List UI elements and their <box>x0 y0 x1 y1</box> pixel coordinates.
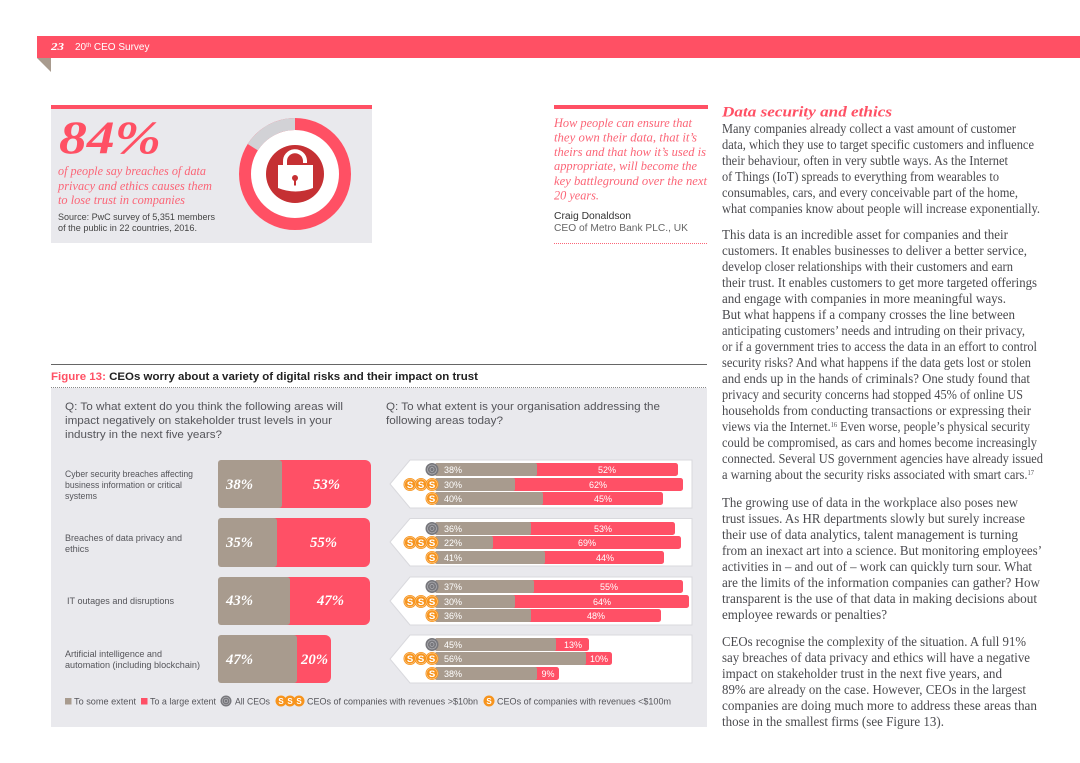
legend: S <box>287 697 293 706</box>
bar group: IT outages: 36% <box>444 611 462 621</box>
bar group: cyber security: 38% <box>444 465 462 475</box>
bar group: artificial intelligence: 38% <box>444 669 462 679</box>
stacked bar chart: stakeholder trust impact: 47% <box>316 593 344 609</box>
body paragraph 3: trust issues. As HR departments slowly but surely increase <box>722 511 1025 526</box>
body paragraph 2: Even worse, people’s physical security <box>837 419 1030 434</box>
question right: following areas today? <box>386 415 503 427</box>
row labels <box>65 469 200 670</box>
body paragraph 3: employee rewards or penalties? <box>722 607 887 622</box>
pull quote: appropriate, will become the <box>554 158 697 173</box>
statistic description: of people say breaches of data <box>58 163 206 178</box>
body paragraph 4: say breaches of data privacy and ethics will have a negative <box>722 650 1030 665</box>
bar group: IT outages: 55% <box>600 582 618 592</box>
donut chart with lock icon <box>239 118 351 230</box>
body paragraph 2: a warning about the security risks associated with smart cars. <box>722 467 1052 482</box>
header band: 20 <box>75 42 86 53</box>
bar group: cyber security: 62% <box>589 480 607 490</box>
body paragraph 3 <box>722 495 1042 622</box>
body paragraph 2: 17 <box>1028 469 1034 477</box>
bar group: artificial intelligence: 10% <box>590 654 608 664</box>
body paragraph 2: views via the Internet. <box>722 419 842 434</box>
row labels: Breaches of data privacy and <box>65 533 182 543</box>
bar group: data privacy: 36% <box>444 524 462 534</box>
legend <box>65 696 671 706</box>
legend: To a large extent <box>150 696 216 706</box>
bar group: cyber security: 30% <box>444 480 462 490</box>
source note: of the public in 22 countries, 2016. <box>58 223 197 233</box>
question left: impact negatively on stakeholder trust levels in your <box>65 415 332 427</box>
question left <box>65 401 343 441</box>
pull quote: theirs and that how it’s used is <box>554 144 706 159</box>
source note <box>58 212 215 233</box>
body paragraph 2: could be compromised, as cars and homes become increasingly <box>722 435 1037 450</box>
bar group: IT outages <box>390 577 692 625</box>
stacked bar chart: stakeholder trust impact: 20% <box>300 652 328 668</box>
bar group: IT outages: S <box>407 597 413 608</box>
row labels: IT outages and disruptions <box>67 596 174 606</box>
bar group: artificial intelligence: 9% <box>541 669 555 679</box>
question left: industry in the next five years? <box>65 429 222 441</box>
body paragraph 2: 16 <box>831 421 837 429</box>
source note: Source: PwC survey of 5,351 members <box>58 212 215 222</box>
pull quote: 20 years. <box>554 188 599 202</box>
body paragraph 2: anticipating customers’ needs and intruding on their privacy, <box>722 323 1025 338</box>
bar group: IT outages: 30% <box>444 597 462 607</box>
row labels: automation (including blockchain) <box>65 660 200 670</box>
bar group: artificial intelligence <box>390 635 692 683</box>
bar group: cyber security: 45% <box>594 494 612 504</box>
stacked bar chart: stakeholder trust impact: 53% <box>313 477 340 493</box>
bar group: data privacy: S <box>418 538 424 549</box>
pull quote: Craig Donaldson <box>554 211 631 222</box>
statistic description <box>57 163 212 207</box>
bar group: cyber security: 52% <box>598 465 616 475</box>
body paragraph 2: But what happens if a company crosses the line between <box>722 307 1015 322</box>
question right <box>386 401 660 427</box>
stacked bar chart: stakeholder trust impact: 55% <box>310 535 337 551</box>
bar group: data privacy: 44% <box>596 553 614 563</box>
row labels: Artificial intelligence and <box>65 649 162 659</box>
header band: 23 <box>50 41 65 53</box>
header band: CEO Survey <box>91 42 150 53</box>
bar group: data privacy: 69% <box>578 538 596 548</box>
body paragraph 2: and ends up in the hands of criminals? One study found that <box>722 371 1030 386</box>
figure title: Figure 13: CEOs worry about a variety of digital risks and their impact on trust <box>51 371 478 383</box>
statistic description: to lose trust in companies <box>58 192 185 207</box>
bar group: cyber security: S <box>429 480 435 491</box>
body paragraph 4: CEOs recognise the complexity of the situation. A full 91% <box>722 634 1026 649</box>
big number: 84% <box>59 112 161 164</box>
bar group: data privacy <box>390 518 692 566</box>
body paragraph 4: 89% are already on the case. However, CEOs in the largest <box>722 682 1026 697</box>
bar group: IT outages: 48% <box>587 611 605 621</box>
question left: Q: To what extent do you think the following areas will <box>65 401 343 413</box>
legend: CEOs of companies with revenues <$100m <box>497 696 671 706</box>
body paragraph 3: are the limits of the information companies can gather? How <box>722 575 1040 590</box>
bar group: data privacy: 22% <box>444 538 462 548</box>
bar group: data privacy: 53% <box>594 524 612 534</box>
bar group: artificial intelligence: S <box>407 654 413 665</box>
header band <box>37 36 1080 72</box>
bar group: artificial intelligence: S <box>429 669 435 680</box>
bar group: IT outages: 64% <box>593 597 611 607</box>
legend: All CEOs <box>235 696 270 706</box>
bar group: IT outages: 37% <box>444 582 462 592</box>
bar group: cyber security <box>390 460 692 508</box>
bar group: cyber security: S <box>418 480 424 491</box>
body paragraph 2: connected. Several US government agencies have already issued <box>722 451 1043 466</box>
bar group: artificial intelligence: 56% <box>444 654 462 664</box>
body paragraph 3: activities in – and out of – work can quickly turn sour. What <box>722 559 1032 574</box>
legend: S <box>486 697 492 706</box>
body paragraph 3: transparent is the use of that data in making decisions about <box>722 591 1037 606</box>
body paragraph 1 <box>722 121 1040 216</box>
stacked bar chart: stakeholder trust impact: 38% <box>225 477 253 493</box>
body paragraph 2: security risks? And what happens if the data gets lost or stolen <box>722 355 1031 370</box>
legend: S <box>296 697 302 706</box>
row labels: business information or critical <box>65 480 182 490</box>
pull quote: How people can ensure that <box>553 115 692 130</box>
bar group: IT outages: S <box>418 597 424 608</box>
bar group: artificial intelligence: S <box>429 654 435 665</box>
legend: CEOs of companies with revenues >$10bn <box>307 696 478 706</box>
header band: th <box>86 43 91 49</box>
bar group: data privacy: S <box>407 538 413 549</box>
body paragraph 1: their behaviour, often in very subtle ways. As the Internet <box>722 153 1008 168</box>
body paragraph 2: develop closer relationships with their customers and earn <box>722 259 1013 274</box>
pull quote <box>553 105 708 244</box>
body paragraph 1: of Things (IoT) spreads to everything from wearables to <box>722 169 999 184</box>
panel: 84% statistic <box>51 105 372 243</box>
stacked bar chart: stakeholder trust impact <box>218 460 371 683</box>
legend: To some extent <box>74 696 136 706</box>
body paragraph 1: data, which they use to target specific customers and influence <box>722 137 1034 152</box>
bar group: IT outages: S <box>429 611 435 622</box>
bar group: cyber security: 40% <box>444 494 462 504</box>
body paragraph 1: what companies know about people will increase exponentially. <box>722 201 1040 216</box>
body paragraph 2: privacy and security concerns had stopped 45% of online US <box>722 387 1023 402</box>
body paragraph 2 <box>722 227 1043 482</box>
body paragraph 2: and engage with companies in more meaningful ways. <box>722 291 1006 306</box>
body paragraph 4: companies are doing much more to address these areas than <box>722 698 1037 713</box>
bar group: artificial intelligence: 45% <box>444 640 462 650</box>
panel: figure 13 <box>51 364 707 727</box>
stacked bar chart: stakeholder trust impact: 35% <box>225 535 253 551</box>
bar group: data privacy: S <box>429 538 435 549</box>
pull quote: they own their data, that it’s <box>554 130 697 144</box>
body paragraph 1: consumables, cars, and every conceivable part of the home, <box>722 185 1018 200</box>
body paragraph 3: their use of data analytics, talent management is turning <box>722 527 1018 542</box>
pull quote: key battleground over the next <box>554 173 707 188</box>
stacked bar chart: stakeholder trust impact: 47% <box>225 652 253 668</box>
bar group: artificial intelligence: S <box>418 654 424 665</box>
bar group: data privacy: 41% <box>444 553 462 563</box>
body paragraph 2: This data is an incredible asset for companies and their <box>722 227 1008 242</box>
row labels: systems <box>65 491 97 501</box>
bar group: data privacy: S <box>429 553 435 564</box>
bar group: IT outages: S <box>429 597 435 608</box>
body paragraph 4: those in the smallest firms (see Figure 13). <box>722 714 944 729</box>
body paragraph 3: from an inexact art into a science. But monitoring employees’ <box>722 543 1042 558</box>
body paragraph 2: or if a government tries to access the data in an effort to control <box>722 339 1037 354</box>
body paragraph 1: Many companies already collect a vast amount of customer <box>722 121 1016 136</box>
bar group: artificial intelligence: 13% <box>564 640 582 650</box>
legend: S <box>278 697 284 706</box>
heading: data security and ethics: Data security and ethics <box>721 104 892 120</box>
pull quote: CEO of Metro Bank PLC., UK <box>554 223 688 234</box>
row labels: ethics <box>65 544 89 554</box>
row labels: Cyber security breaches affecting <box>65 469 193 479</box>
stacked bar chart: stakeholder trust impact: 43% <box>225 593 253 609</box>
bar group: cyber security: S <box>429 494 435 505</box>
body paragraph 2: households from conducting transactions or expressing their <box>722 403 1031 418</box>
body paragraph 4 <box>722 634 1037 729</box>
bar group: cyber security: S <box>407 480 413 491</box>
statistic description: privacy and ethics causes them <box>57 178 212 193</box>
body paragraph 4: impact on stakeholder trust in the next five years, and <box>722 666 1002 681</box>
question right: Q: To what extent is your organisation addressing the <box>386 401 660 413</box>
body paragraph 3: The growing use of data in the workplace also poses new <box>722 495 1018 510</box>
body paragraph 2: customers. It enables businesses to deliver a better service, <box>722 243 1027 258</box>
body paragraph 2: their trust. It enables customers to get more targeted offerings <box>722 275 1037 290</box>
